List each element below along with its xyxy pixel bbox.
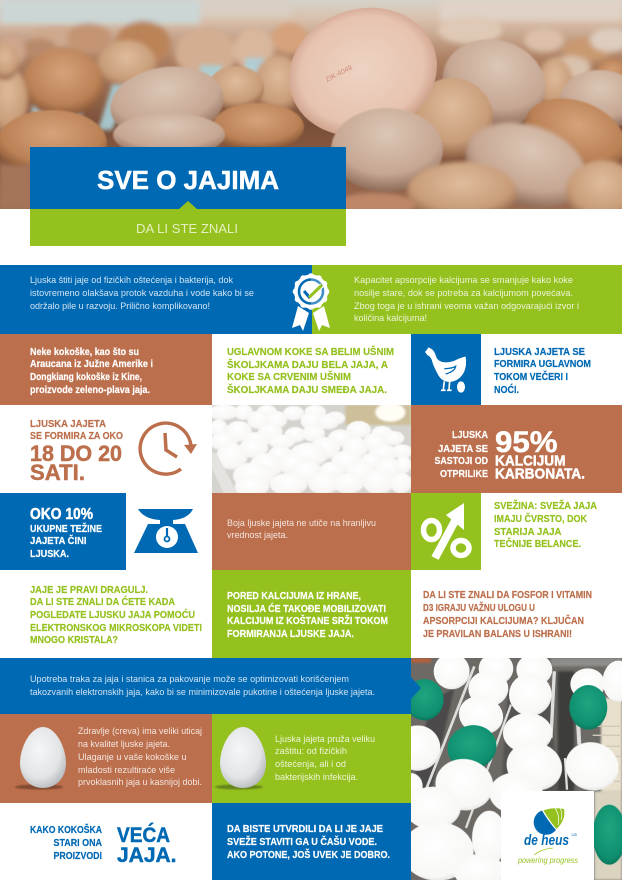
panel: bone marrow calcium: KALCIJUM IZ KOŠTANE SRŽI TOKOM [227,614,388,627]
panel: shell protection (blue) [0,265,312,334]
text: freshness: SVEŽINA: SVEŽA JAJA [494,499,597,512]
panel: 95% calcium carbonate: SASTOJI OD [434,456,488,467]
panel: electronic eggs [0,658,421,714]
text: shell forms at night: NOĆI. [494,383,519,396]
text: shell forms at night [494,347,591,396]
text: older hens lay bigger eggs: VEĆA [117,823,170,847]
panel: shell weight 10%: OKO 10% [30,506,93,523]
panel: gut health: Zdravlje (creva) ima veliki uticaj [78,726,202,737]
panel: electronic eggs: Upotreba traka za jaja i stanica za pakovanje može se optimizovati korišćenjem [30,674,349,685]
title: SVE O JAJIMA [97,165,279,195]
panel: bone marrow calcium: PORED KALCIJUMA IZ HRANE, [227,591,361,602]
logo: de heus: powering progress [517,855,579,865]
panel: gut health: mladosti rezultiraće više [78,765,175,776]
panel: bone marrow calcium: NOSILJA ĆE TAKOĐE MOBILIZOVATI [227,602,386,615]
panel: shell protection (blue): Ljuska štiti jaje od fizičkih oštećenja i bakterija, dok [30,275,233,286]
text: egg as a gem: JAJE JE PRAVI DRAGULJ. [30,585,148,596]
hero photo: brown eggs [0,0,622,224]
panel: green-blue eggs fact: Neke kokoške, kao što su [30,347,139,358]
text: freshness [494,499,597,550]
text: older hens lay bigger eggs [30,823,176,867]
text: freshness: STARIJA JAJA [494,527,562,538]
text: shell forming time: SE FORMIRA ZA OKO [30,431,123,442]
panel: green-blue eggs fact: Araucana iz Južne Amerike i [30,359,153,370]
panel: shell protection (blue): istovremeno olakšava protok vazduha i vode kako bi se [30,288,254,299]
title panel [30,147,346,209]
panel: shell colour and nutrition [212,493,411,570]
panel: electronic eggs: takozvanih elektronskih jaja, kako bi se minimizovale pukotine i oštećenja ljuske jajeta. [30,687,375,698]
panel: shell protection from infection: zaštitu: od fizičkih [275,746,347,757]
panel: water freshness test: SVEŽE STAVITI GA U ČAŠU VODE. [227,835,377,848]
text: shell forming time: 18 DO 20 [30,441,122,466]
text: phosphorus and vitamin D3 [423,590,592,640]
panel: 95% calcium carbonate: KALCIJUM [495,452,566,470]
subtitle panel [30,201,346,246]
text: egg as a gem: MNOGO KRISTALA? [30,635,118,646]
text: shell forming time: LJUSKA JAJETA [30,419,106,430]
text: shell forming time [30,419,123,485]
panel: shell protection from infection [212,714,411,803]
panel: shell colour and nutrition: Boja ljuske jajeta ne utiče na hranljivu [227,518,376,529]
text: egg as a gem: ELEKTRONSKOG MIKROSKOPA VIDETI [30,623,202,634]
panel: 95% calcium carbonate: OTPRILIKE [440,469,488,480]
text: older hens lay bigger eggs: STARI ONA [54,838,102,849]
text: ear lobes and egg colour: ŠKOLJKAMA DAJU BELA JAJA, A [227,358,388,371]
photo: eggs on conveyor [395,653,622,880]
panel: shell weight 10% [0,493,126,570]
text: egg as a gem: DA LI STE ZNALI DA ĆETE KADA [30,595,175,608]
icon: rosette badge [292,273,330,331]
panel: bone marrow calcium [212,570,411,658]
subtitle panel: DA LI STE ZNALI [136,221,238,236]
icon: kitchen scale [134,509,198,553]
logo: de heus: 125 [571,833,577,837]
text: phosphorus and vitamin D3: D3 IGRAJU VAŽNU ULOGU U [423,601,535,614]
panel: shell weight 10%: JAJETA ČINI [30,534,87,547]
text: older hens lay bigger eggs: KAKO KOKOŠKA [30,823,102,836]
icon: egg [15,727,66,790]
main egg with stamp: ZIK-4049 [325,64,354,84]
text: ear lobes and egg colour: UGLAVNOM KOKE SA BELIM UŠNIM [227,345,394,358]
text: shell forming time: SATI. [30,460,85,485]
panel: shell weight 10%: LJUSKA. [30,549,69,560]
panel: gut health: Ulaganje u vaše kokoške u [78,752,186,763]
panel: 95% calcium carbonate: KARBONATA. [495,466,585,482]
panel: water freshness test: AKO POTONE, JOŠ UVEK JE DOBRO. [227,848,390,861]
panel: bone marrow calcium: FORMIRANJA LJUSKE JAJA. [227,629,354,640]
panel: gut health: prvoklasnih jaja u kasnijoj dobi. [78,777,202,788]
text: ear lobes and egg colour: ŠKOLJKAMA DAJU SMEĐA JAJA. [227,383,387,396]
icon: clock [140,423,197,474]
text: shell forms at night: LJUSKA JAJETA SE [494,347,585,358]
panel: water freshness test: DA BISTE UTVRDILI DA LI JE JAJE [227,824,383,835]
icon: egg [215,727,266,790]
panel: calcium absorption (green): Zbog toga je u ishrani veoma važan odgovarajući izvor i [354,301,579,312]
text: freshness: TEČNIJE BELANCE. [494,537,581,550]
text: egg as a gem [30,585,202,646]
text: phosphorus and vitamin D3: JE PRAVILAN BALANS U ISHRANI! [423,629,572,640]
panel: calcium absorption (green) [312,265,622,334]
text: shell forms at night: TOKOM VEČERI I [494,370,568,383]
panel: shell protection (blue): održalo pile u razvoju. Prilično komplikovano! [30,301,210,312]
main egg with stamp [289,8,437,134]
panel: green-blue eggs fact [0,334,212,405]
panel: calcium absorption (green): Kapacitet apsorpcije kalcijuma se smanjuje kako koke [354,275,573,286]
panel: gut health [0,714,212,803]
panel: green-blue eggs fact: Dongkiang kokoške iz Kine, [30,372,142,383]
icon: percent with arrow [411,493,481,570]
text: older hens lay bigger eggs: JAJA. [117,844,176,867]
text: shell forms at night: FORMIRA UGLAVNOM [494,359,591,370]
text: ear lobes and egg colour: KOKE SA CRVENIM UŠNIM [227,370,351,383]
panel: shell colour and nutrition: vrednost jajeta. [227,530,288,541]
text: phosphorus and vitamin D3: APSORPCIJI KALCIJUMA? KLJUČAN [423,614,584,627]
text: older hens lay bigger eggs: PROIZVODI [54,851,102,862]
panel: 95% calcium carbonate: 95% [495,426,558,459]
panel: calcium absorption (green): nosilje stare, dok se potreba za kalcijumom povećava. [354,288,573,299]
panel: 95% calcium carbonate: JAJETA SE [438,444,488,455]
logo: de heus: de heus [524,832,569,849]
text: egg as a gem: POGLEDATE LJUSKU JAJA POMOĆU [30,608,195,621]
panel: 95% calcium carbonate [411,405,622,493]
panel: shell weight 10%: UKUPNE TEŽINE [30,522,102,535]
icon: hen with egg [411,334,481,405]
panel: gut health: na kvalitet ljuske jajeta. [78,739,170,750]
panel: shell protection from infection: bakterijskih infekcija. [275,772,358,783]
panel: shell protection from infection: oštećenja, ali i od [275,759,346,770]
logo: de heus [501,791,594,880]
text: phosphorus and vitamin D3: DA LI STE ZNALI DA FOSFOR I VITAMIN [423,590,592,601]
panel: shell protection from infection: Ljuska jajeta pruža veliku [275,734,375,745]
panel: 95% calcium carbonate: LJUSKA [452,430,488,441]
panel: water freshness test [212,803,411,880]
text: ear lobes and egg colour [227,345,394,396]
panel: calcium absorption (green): količina kalcijuma! [354,313,427,324]
photo: white eggs [209,403,413,497]
text: freshness: IMAJU ČVRSTO, DOK [494,512,588,525]
panel: green-blue eggs fact: proizvode zeleno-plava jaja. [30,385,150,396]
